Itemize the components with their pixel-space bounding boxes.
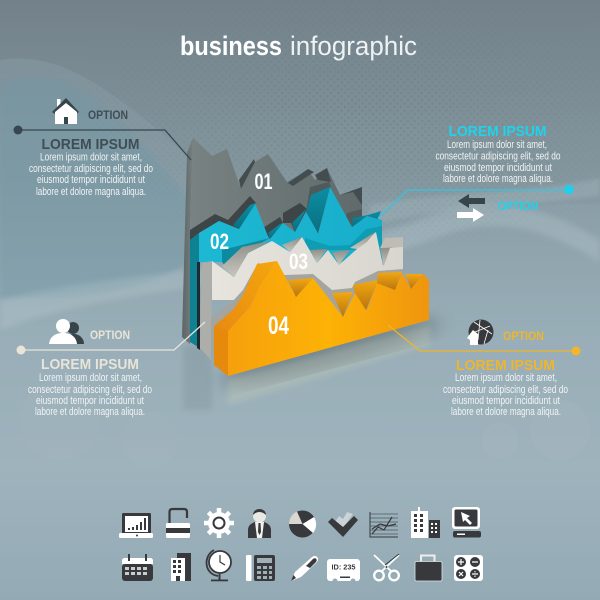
title: business <box>180 31 282 61</box>
icon: check mark <box>328 512 358 537</box>
icon: monitor cursor <box>452 507 481 538</box>
icon: house <box>52 98 79 124</box>
panel: top left option <box>14 98 153 198</box>
icon: pie chart <box>289 510 316 538</box>
icon: id card <box>327 559 360 584</box>
icon: office towers <box>411 507 440 538</box>
body text: eiusmod tempor incididunt ut <box>452 395 560 407</box>
icon: open lock <box>166 509 190 538</box>
chart number 04: 04 <box>268 312 289 340</box>
icon: hotel building <box>171 553 191 581</box>
body text: labore et dolore magna aliqua. <box>451 406 561 418</box>
connector dot <box>16 346 26 354</box>
connector lines <box>18 130 576 351</box>
icon: laptop chart <box>119 513 153 538</box>
body text: consectetur adipiscing elit, sed do <box>436 150 560 162</box>
body text <box>443 372 568 418</box>
body text: eiusmod tempor incididunt ut <box>444 162 552 174</box>
panel: bottom left option <box>16 319 152 418</box>
heading: LOREM IPSUM <box>42 136 140 153</box>
3D layered chart <box>182 138 429 376</box>
body text: Lorem ipsum dolor sit amet, <box>447 139 547 151</box>
body text: labore et dolore magna aliqua. <box>36 186 146 198</box>
layer 04 orange <box>214 261 429 376</box>
connector dot <box>564 185 574 194</box>
option label: OPTION <box>88 110 128 122</box>
chart number 02: 02 <box>210 229 229 254</box>
icon: line chart <box>370 512 398 537</box>
icon: math symbols <box>454 555 483 581</box>
icon: calendar <box>122 554 153 581</box>
icon: businessman <box>248 509 271 538</box>
body text: eiusmod tempor incididunt ut <box>37 174 145 186</box>
body text: eiusmod tempor incididunt ut <box>36 395 144 407</box>
body text: labore et dolore magna aliqua. <box>35 406 145 418</box>
heading: LOREM IPSUM <box>456 357 555 374</box>
icon: scissors <box>374 554 399 580</box>
body text: labore et dolore magna aliqua. <box>443 173 553 185</box>
body text <box>28 372 152 418</box>
icon: calculator <box>246 555 275 581</box>
layer 03 white <box>200 232 403 360</box>
panel: top right option <box>436 123 574 222</box>
heading: LOREM IPSUM <box>448 123 546 140</box>
panel: bottom right option <box>443 320 580 418</box>
option label: OPTION <box>498 201 538 213</box>
icon: briefcase <box>415 556 442 581</box>
icon: id card: ID: 235 <box>332 562 356 572</box>
icon: pen <box>291 556 318 581</box>
icon: exchange arrows <box>457 194 485 222</box>
layer 02 blue <box>190 182 382 350</box>
chart number 03: 03 <box>289 249 308 274</box>
option label: OPTION <box>503 331 544 343</box>
text: infographic <box>290 31 417 61</box>
body text: consectetur adipiscing elit, sed do <box>28 384 152 396</box>
chart number 01: 01 <box>254 169 272 194</box>
icon: head network <box>467 320 494 345</box>
body text <box>29 152 153 198</box>
icon row 1 <box>119 507 481 538</box>
chart shadow and reflection <box>183 309 445 410</box>
body text: Lorem ipsum dolor sit amet, <box>40 152 142 164</box>
connector dot <box>572 346 580 356</box>
icon row 2 <box>122 550 483 584</box>
body text: consectetur adipiscing elit, sed do <box>29 163 153 175</box>
icon: globe clock <box>207 550 231 581</box>
body text <box>436 139 560 185</box>
connector dot <box>14 126 22 134</box>
body text: Lorem ipsum dolor sit amet, <box>455 372 557 384</box>
body text: Lorem ipsum dolor sit amet, <box>39 372 142 384</box>
layer 01 grey <box>182 138 362 344</box>
icon: people <box>49 319 84 344</box>
heading: LOREM IPSUM <box>41 356 139 373</box>
option label: OPTION <box>90 330 130 342</box>
icon: gear <box>204 508 234 538</box>
